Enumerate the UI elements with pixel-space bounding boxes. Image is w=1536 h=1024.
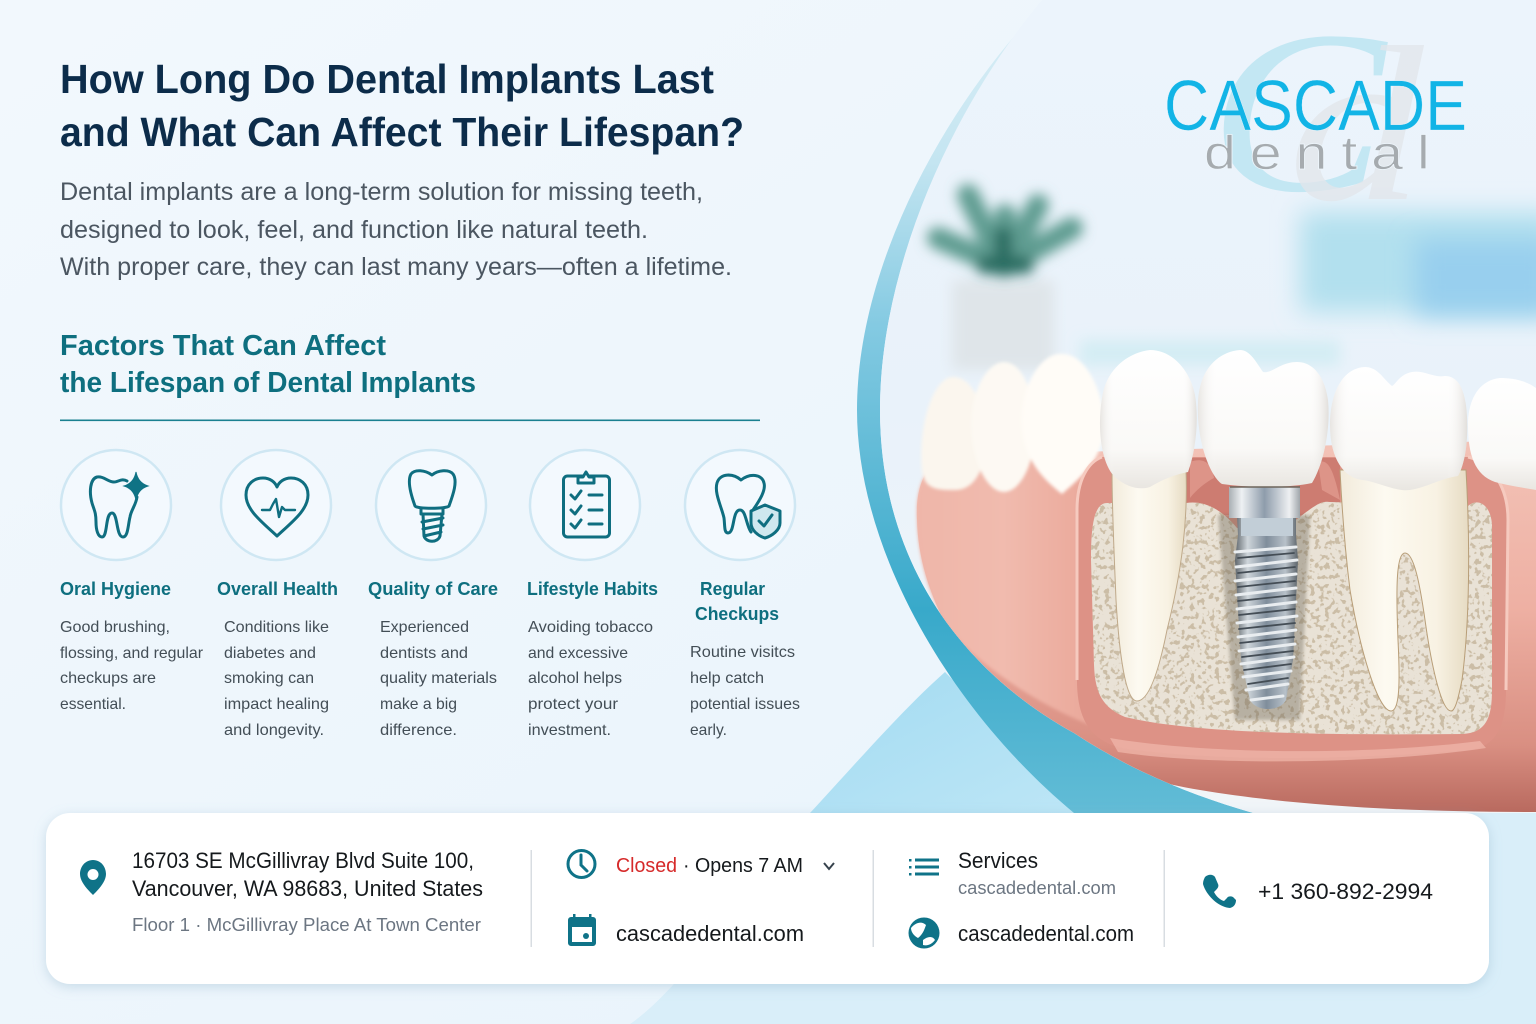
label: Overall Health xyxy=(217,578,338,599)
photo background with blurred room xyxy=(860,0,1536,813)
description: early. xyxy=(690,722,727,739)
factor: quality of care xyxy=(368,450,498,739)
intro paragraph: designed to look, feel, and function like natural teeth. xyxy=(60,216,648,244)
logo wordmark: CASCADE xyxy=(1164,67,1467,146)
services block: cascadedental.com xyxy=(958,878,1116,898)
description xyxy=(690,644,800,739)
description: Routine visitcs xyxy=(690,644,795,661)
description: flossing, and regular xyxy=(60,645,204,662)
phone block xyxy=(1203,875,1433,908)
phone number: +1 360-892-2994 xyxy=(1258,879,1433,904)
section heading xyxy=(60,330,476,399)
address text: 16703 SE McGillivray Blvd Suite 100, xyxy=(132,848,474,873)
molar roots right xyxy=(1340,470,1469,711)
icon: chevron xyxy=(824,863,834,869)
gum cross-section xyxy=(1077,457,1506,724)
hours block xyxy=(568,850,834,946)
natural tooth root left xyxy=(1112,470,1186,701)
website text: cascadedental.com xyxy=(616,921,804,946)
title xyxy=(60,56,744,155)
section heading: the Lifespan of Dental Implants xyxy=(60,367,476,399)
factor: oral hygiene xyxy=(60,450,204,713)
description: Experienced xyxy=(380,619,469,636)
icon: tooth with shield xyxy=(685,450,795,560)
description: alcohol helps xyxy=(528,670,622,687)
label: Checkups xyxy=(695,603,779,624)
services text: Services xyxy=(958,848,1038,873)
description: checkups are xyxy=(60,670,156,687)
description: investment. xyxy=(528,722,611,739)
address text: Vancouver, WA 98683, United States xyxy=(132,876,483,901)
molar crown right xyxy=(1330,367,1467,490)
description: and longevity. xyxy=(224,722,324,739)
logo monogram: d xyxy=(1288,1,1425,247)
factor: overall health xyxy=(217,450,338,739)
factor: lifestyle habits xyxy=(527,450,658,739)
intro paragraph: With proper care, they can last many years—often a lifetime. xyxy=(60,253,732,281)
description: dentists and xyxy=(380,645,468,662)
description: Good brushing, xyxy=(60,619,170,636)
icon: location pin xyxy=(80,860,106,895)
label: Oral Hygiene xyxy=(60,578,171,599)
label: Quality of Care xyxy=(368,578,498,599)
icon: clipboard checklist xyxy=(530,450,640,560)
hours text: · Opens 7 AM xyxy=(683,854,803,877)
intro paragraph xyxy=(60,178,732,281)
services block xyxy=(908,848,1134,948)
blurred back teeth xyxy=(921,354,1104,494)
gum body xyxy=(917,440,1536,812)
description: help catch xyxy=(690,670,764,687)
label xyxy=(695,578,779,624)
intro paragraph: Dental implants are a long-term solution for missing teeth, xyxy=(60,178,703,206)
title: and What Can Affect Their Lifespan? xyxy=(60,109,744,155)
accent shape: blue swoosh xyxy=(857,0,1253,813)
description: essential. xyxy=(60,696,126,713)
description: Conditions like xyxy=(224,619,329,636)
description xyxy=(60,619,204,713)
section heading: Factors That Can Affect xyxy=(60,330,386,362)
icon: phone xyxy=(1203,875,1236,908)
icon: list xyxy=(909,858,939,876)
description: quality materials xyxy=(380,670,497,687)
bone tissue xyxy=(1085,495,1500,740)
label: Regular xyxy=(700,578,765,599)
description: smoking can xyxy=(224,670,314,687)
description: protect your xyxy=(528,696,619,713)
description: Avoiding tobacco xyxy=(528,619,653,636)
accent shape: light blue wedge xyxy=(810,672,1085,813)
label: Lifestyle Habits xyxy=(527,578,658,599)
description: impact healing xyxy=(224,696,329,713)
icon: heart with pulse xyxy=(221,450,331,560)
description: difference. xyxy=(380,722,457,739)
photo: dental implant model xyxy=(860,0,1536,813)
description: diabetes and xyxy=(224,645,316,662)
description: and excessive xyxy=(528,645,628,662)
icon: globe xyxy=(908,918,940,948)
description: make a big xyxy=(380,696,457,713)
far right tooth xyxy=(1468,378,1536,490)
implant screw xyxy=(1218,487,1310,720)
hours text xyxy=(616,854,803,877)
description xyxy=(380,619,497,739)
logo: Cascade Dental xyxy=(1164,0,1467,247)
icon: implant xyxy=(376,450,486,560)
address block xyxy=(80,848,483,935)
logo subtitle: dental xyxy=(1204,128,1430,180)
address text: Floor 1 · McGillivray Place At Town Center xyxy=(132,914,481,935)
factor: regular checkups xyxy=(685,450,800,739)
icon: clock xyxy=(568,850,595,878)
description xyxy=(528,619,653,739)
implant crown xyxy=(1198,350,1329,487)
website text: cascadedental.com xyxy=(958,921,1134,946)
description: potential issues xyxy=(690,696,800,713)
deep gum wedges xyxy=(1184,458,1340,515)
icon: calendar xyxy=(568,914,596,946)
description xyxy=(224,619,329,739)
panel: contact card xyxy=(46,813,1489,984)
title: How Long Do Dental Implants Last xyxy=(60,56,714,102)
icon: sparkling tooth xyxy=(61,450,171,560)
address text xyxy=(132,848,483,935)
hours text: Closed xyxy=(616,854,677,877)
natural tooth crown left xyxy=(1100,350,1197,488)
